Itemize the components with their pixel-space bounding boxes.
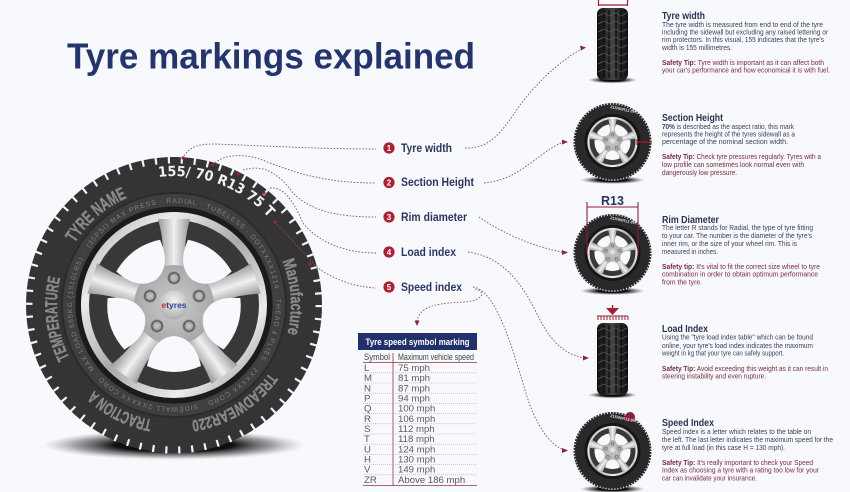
table rows: H [364, 454, 371, 466]
table rows: 149 mph [398, 464, 435, 476]
panel: load index: Load Index [662, 324, 708, 335]
table header [358, 333, 477, 350]
table rows: Q [364, 404, 371, 414]
callout 1: Tyre width [401, 143, 452, 155]
sidewall: manufacture: Manufacture [282, 258, 304, 335]
callout list [383, 142, 474, 294]
table rows: 130 mph [398, 454, 435, 466]
tyre body with tread [26, 157, 322, 453]
sidewall: temperature: TEMPERATURE [45, 276, 69, 363]
panel: section height: 70% is described as the aspect ratio, this mark [662, 122, 794, 131]
table rows: L [364, 363, 370, 374]
panel: section height [662, 113, 821, 177]
panel: load index: online, your tyre's load index indicates the maximum [662, 341, 813, 350]
panel: speed index: Speed index is a letter which relates to the table on [662, 427, 811, 436]
callout 5 [383, 281, 463, 294]
table rows: V [364, 464, 371, 476]
panel: speed index: car can invalidate your insurance. [662, 474, 757, 482]
title: Tyre markings explained [67, 36, 475, 76]
panel: speed index: Index as choosing a tyre with a rating too low for your [662, 466, 820, 474]
table rows: T [364, 434, 370, 445]
panel: tyre width [661, 11, 830, 74]
sidewall: treadwear: TREADWEAR220 [192, 374, 278, 432]
table column titles: Symbol [364, 351, 390, 362]
sidewall: traction: TRACTION A [88, 390, 150, 432]
callout 3: Rim diameter [401, 212, 467, 224]
panel: tyre width: Safety Tip: Tyre width is important as it can affect both [662, 58, 824, 67]
table rows: R [364, 414, 371, 425]
callout 5: 5 [387, 283, 392, 292]
main tyre illustration [26, 156, 322, 460]
callout 4: Load index [401, 247, 457, 259]
leader lines from labels to detail illustrations [414, 46, 589, 453]
panel: section height: Section Height [662, 113, 724, 124]
panel: rim diameter: to your car. The number is the diameter of the tyre's [662, 231, 812, 240]
panel: load index: weight in kg that your tyre can safely support. [661, 348, 784, 358]
panel: tyre width: rim protectors. In this visual, 155 indicates that the tyre's [662, 35, 824, 44]
panel: section height: percentage of the nominal section width. [662, 137, 788, 146]
panel: rim diameter: The letter R stands for Radial, the type of tyre fitting [662, 223, 813, 232]
panel: load index: Safety Tip: Avoid exceeding this weight as it can result in [662, 364, 828, 373]
panel: section height: represents the height of the tyres sidewall as a [662, 130, 795, 138]
panel: tyre width: Tyre width [662, 11, 705, 22]
tyre size marking: 155/ 70 R13 75 T [159, 166, 276, 216]
table column titles [364, 351, 474, 362]
table rows: P [364, 394, 370, 404]
panel: rim diameter: combination in order to obtain optimum performance [662, 270, 818, 278]
panel: section height: dangerously low pressure. [662, 168, 737, 177]
table rows: 124 mph [398, 444, 435, 456]
callout 4: 4 [387, 248, 392, 257]
table rows: M [364, 373, 372, 384]
panel: speed index: the left. The last letter indicates the maximum speed for the [662, 435, 833, 444]
table rows: U [364, 444, 371, 456]
icon: load index tyre [588, 305, 638, 398]
wheel badge: etyres [161, 300, 187, 310]
panel: load index: Using the "tyre load index table" which can be found [662, 332, 813, 342]
icon: rim diameter wheel [574, 194, 652, 295]
callout 5: Speed index [401, 282, 463, 294]
callout 3: 3 [387, 213, 392, 222]
table rows: ZR [364, 475, 377, 486]
callout 2: 2 [387, 178, 392, 188]
table header: Tyre speed symbol marking [366, 337, 470, 348]
panel: speed index [662, 418, 833, 482]
panel: rim diameter: Safety tip: It's vital to fit the correct size wheel to tyre [662, 262, 820, 271]
table rows: 100 mph [398, 404, 435, 414]
marking dots [181, 156, 312, 266]
icon: tyre width front view [588, 0, 638, 83]
table rows: S [364, 424, 370, 435]
panel: tyre width: your car's performance and how economical it is with fuel. [662, 66, 830, 74]
icon: rim diameter wheel: 215/60R13 89T [610, 215, 638, 226]
table rows: 94 mph [398, 394, 430, 404]
table column titles: Maximum vehicle speed [398, 351, 474, 362]
speed symbol table [358, 333, 477, 486]
sidewall: tyre name: TYRE NAME [64, 186, 127, 241]
leader lines from tyre to labels [184, 144, 376, 288]
panel: load index: steering instability and even rupture. [662, 372, 766, 380]
panel: rim diameter [662, 215, 820, 286]
panel: tyre width: including the sidewall but excluding any raised lettering or [662, 28, 829, 36]
table rows [364, 363, 465, 486]
icon: section height wheel: 215/60R13 89T [610, 104, 638, 115]
icon: section height wheel [574, 103, 652, 184]
icon: speed index wheel: 215/60R13 89T [610, 413, 638, 424]
panel: speed index: Speed Index [662, 418, 714, 429]
panel: speed index: tyre at full load (in this case H = 130 mph). [662, 443, 785, 452]
panel: rim diameter: Rim Diameter [662, 215, 719, 226]
callout 1: 1 [387, 144, 392, 153]
table rows: 87 mph [398, 384, 430, 394]
panel: section height: Safety Tip: Check tyre pressures regularly. Tyres with a [662, 152, 821, 161]
panel: rim diameter: inner rim, or the size of your wheel rim. This is [662, 239, 797, 248]
callout 4 [383, 246, 457, 259]
sidewall inner ring text: (35PSI) MAX PRESS · RADIAL · TUBELESS · DOTXXXX1214 · THEAD 4 PLIES · 2XXXXX CORD · SIDEWALL 2XXXXX CORD · MAX LOAD 685KG (1510LBS) · [67, 198, 281, 412]
tyre ground shadow [42, 430, 306, 460]
callout 1 [383, 142, 452, 155]
alloy wheel [81, 212, 267, 398]
table rows: N [364, 384, 371, 394]
table rows: 112 mph [398, 424, 435, 435]
panel: load index [661, 324, 828, 380]
table rows: Above 186 mph [398, 475, 465, 486]
callout 2: Section Height [401, 177, 474, 189]
panel: speed index: Safety Tip: It's really important to check your Speed [662, 458, 813, 467]
icon: speed index wheel [574, 412, 652, 492]
table rows: 106 mph [398, 414, 435, 425]
table rows: 81 mph [398, 373, 430, 384]
panel: tyre width: The tyre width is measured from end to end of the tyre [662, 20, 823, 29]
table rows: 118 mph [398, 434, 435, 445]
icon: rim diameter wheel: R13 [601, 194, 624, 208]
panel: tyre width: width is 155 millimetres. [661, 43, 732, 52]
table rows: 75 mph [398, 363, 430, 374]
panel: rim diameter: from the tyre. [662, 278, 702, 286]
panel: rim diameter: measured in inches. [662, 247, 718, 256]
panel: section height: low profile can sometimes look normal even with [662, 160, 804, 169]
